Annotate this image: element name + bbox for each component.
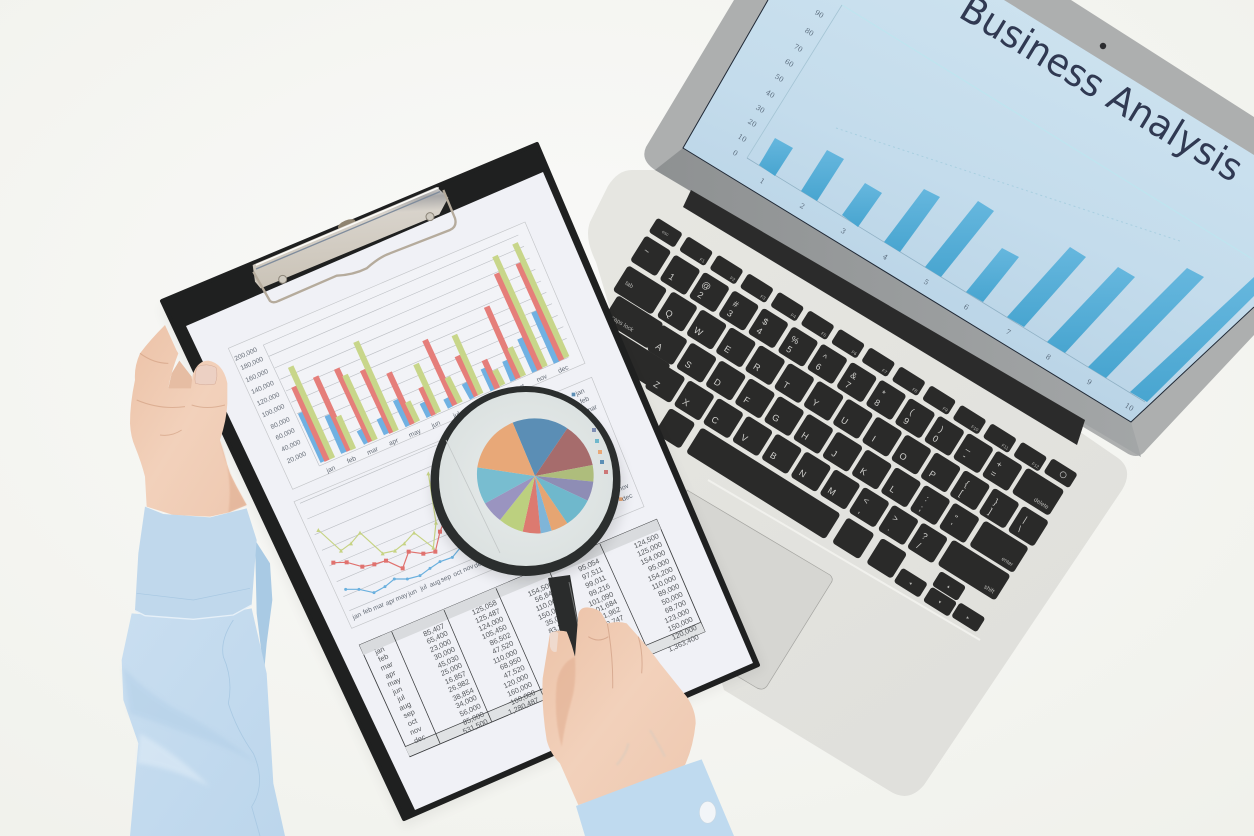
clip plate [253, 187, 448, 288]
function row: F7 [881, 368, 888, 375]
screen y axis labels: 20 [746, 118, 758, 129]
hand shading [220, 440, 247, 513]
line chart month labels [351, 559, 486, 622]
line chart month labels: nov [462, 563, 475, 574]
screen y axis labels: 60 [783, 58, 795, 69]
number row: $ [761, 316, 770, 327]
function row: F9 [942, 406, 949, 413]
values column 4: 102,747 [597, 613, 625, 632]
y axis labels: 20,000 [286, 451, 308, 465]
qwerty row: U [839, 415, 850, 427]
line chart grid [300, 445, 490, 611]
number row: ~ [642, 245, 652, 257]
hand shape [130, 325, 247, 517]
bottom letter row: shift [982, 584, 995, 595]
hinge [683, 190, 1085, 445]
function row: F12 [1031, 461, 1040, 470]
right hand [542, 607, 734, 836]
home row: enter [1000, 556, 1014, 568]
screen x axis labels: 2 [798, 202, 806, 211]
values column 4: 99,216 [587, 581, 611, 599]
values column 3: 154,500 [526, 580, 554, 599]
keyboard well edge [708, 480, 980, 640]
number row: + [994, 459, 1004, 470]
chart frame [228, 222, 585, 489]
month column: jan [372, 644, 386, 657]
laptop screen [683, 0, 1254, 422]
bottom letter row: / [915, 541, 923, 551]
bottom letter row: M [826, 485, 838, 498]
values column 2 [470, 598, 540, 717]
values column 1: 65,400 [425, 629, 449, 646]
blue bars [301, 312, 557, 462]
values column 2: 1,280,487 [507, 695, 540, 717]
values column 5: 95,000 [647, 556, 671, 574]
left hand [130, 325, 247, 517]
x axis labels: jan [325, 465, 337, 475]
values column 3: 150,000 [537, 603, 564, 622]
trackpad [660, 490, 832, 689]
number row: = [989, 468, 998, 479]
qwerty row: P [927, 469, 938, 480]
values column 5: 124,500 [632, 531, 660, 550]
number row: 3 [725, 308, 735, 319]
home row: ' [947, 521, 954, 531]
cuff stitching [137, 588, 250, 600]
values column 5: 1,363,400 [667, 632, 700, 654]
y axis labels: 100,000 [261, 403, 286, 419]
screen y axis labels: 30 [754, 104, 766, 115]
values column 4: 99,011 [584, 573, 607, 590]
qwerty row: O [897, 451, 909, 463]
values column 1: 531,500 [461, 717, 489, 736]
clipboard [162, 144, 758, 819]
values column 2: 160,000 [509, 688, 537, 707]
values column 3: 110,000 [534, 595, 561, 613]
home row: F [742, 395, 752, 406]
line chart month labels: sep [440, 573, 453, 584]
magnifying glass [430, 386, 624, 660]
webcam [1100, 43, 1106, 49]
pie legend labels: jan [574, 388, 586, 398]
values column 5: 110,000 [650, 573, 677, 592]
lower bezel [655, 148, 1141, 457]
values column 3: 83,200 [547, 619, 571, 636]
bottom letter row: < [861, 495, 871, 506]
function row: F6 [851, 349, 858, 357]
bottom letter row: V [739, 432, 749, 444]
screen y axis labels: 90 [813, 9, 825, 20]
paper [186, 172, 753, 810]
green bars [291, 243, 567, 458]
thumbnail [195, 365, 217, 385]
values column 1: 45,030 [436, 653, 460, 670]
month column: feb [377, 652, 390, 664]
bar chart on screen [759, 138, 1254, 402]
home row: H [800, 430, 810, 442]
values column 1 [422, 621, 489, 736]
laptop lid [644, 0, 1254, 456]
function row: F5 [820, 331, 828, 338]
values column 4: 97,511 [580, 565, 604, 582]
handle [548, 575, 583, 660]
number row: 2 [696, 289, 705, 301]
values column 5: 68,700 [663, 598, 687, 615]
qwerty row: W [692, 325, 705, 338]
back finger [168, 361, 193, 392]
values column 2: 68,950 [498, 655, 522, 672]
values column 5: 154,000 [639, 548, 667, 567]
function row: F4 [790, 312, 797, 320]
month column: dec [412, 732, 427, 745]
x axis labels: nov [536, 373, 549, 384]
hand shape [542, 607, 696, 805]
red bars [294, 263, 562, 461]
line chart month labels: mar [372, 601, 386, 612]
number row: 8 [872, 397, 882, 408]
number row: 9 [901, 415, 911, 427]
function row: F11 [1001, 443, 1010, 451]
number row: & [849, 370, 859, 382]
function row: F8 [911, 387, 919, 394]
bottom letter row: . [886, 523, 893, 533]
qwerty row: E [722, 343, 733, 355]
number row [630, 235, 1065, 516]
number row: 4 [755, 325, 764, 337]
number row: % [789, 334, 801, 346]
screen x axis labels: 4 [881, 253, 890, 262]
data table [359, 519, 705, 757]
pie legend labels: nov [617, 482, 631, 493]
values column 2: 124,000 [477, 614, 505, 633]
home row: D [712, 377, 723, 389]
line chart month labels: aug [429, 578, 442, 589]
home row: G [770, 412, 781, 424]
screen y axis labels: 10 [736, 133, 748, 144]
sleeve seam [223, 620, 260, 836]
y axis labels: 120,000 [256, 391, 281, 408]
x axis labels: feb [346, 455, 358, 465]
values column 5: 154,200 [646, 565, 674, 584]
blue line [346, 540, 467, 593]
bar chart panel [228, 222, 585, 489]
line chart month labels: jul [418, 583, 429, 593]
values column 5: 50,000 [660, 590, 684, 607]
bottom letter row: > [891, 513, 900, 524]
bottom letter row [599, 330, 1011, 601]
values column 5: 123,000 [663, 606, 691, 625]
values column 3: 56,840 [533, 587, 557, 604]
number row: ( [908, 407, 916, 417]
qwerty row: T [781, 379, 791, 391]
lens divider [446, 440, 500, 553]
line chart month labels: feb [362, 606, 374, 616]
screen x axis labels: 9 [1085, 378, 1093, 387]
home row: J [830, 448, 839, 459]
month column: may [386, 675, 402, 689]
screen x axis labels: 5 [922, 278, 930, 287]
pie legend labels [572, 388, 634, 503]
x axis labels: jul [451, 411, 462, 420]
screen y axis labels: 80 [803, 27, 815, 38]
left sleeve [122, 507, 285, 836]
values column 2: 47,520 [491, 639, 515, 656]
screen y axis labels: 0 [731, 149, 739, 158]
values column 1: 85,000 [461, 710, 485, 727]
line chart month labels: may [395, 591, 410, 603]
home row: ; [918, 503, 925, 513]
home row [602, 295, 1029, 573]
x axis labels: may [408, 428, 423, 439]
month column: sep [402, 707, 416, 720]
green line [318, 473, 436, 553]
qwerty row: } [992, 497, 1000, 507]
home row: : [923, 494, 931, 504]
screen y axis labels: 40 [764, 89, 776, 100]
pie legend labels: mar [585, 403, 599, 415]
values column 5: 120,000 [670, 623, 698, 642]
home row: " [951, 513, 959, 523]
bottom letter row: C [710, 414, 721, 426]
home row: L [888, 484, 897, 495]
thumbnail [550, 632, 558, 652]
values column 2: 160,000 [506, 680, 533, 699]
x axis labels: apr [388, 437, 400, 447]
clip [253, 187, 456, 302]
right cuff [576, 759, 734, 836]
values column 2: 110,000 [491, 647, 519, 666]
values column 4: 95,054 [577, 556, 601, 574]
number row: _ [965, 441, 976, 453]
month column: jun [390, 684, 404, 697]
values column 1: 25,000 [439, 661, 463, 678]
values column 1: 16,857 [443, 669, 467, 686]
y axis labels: 180,000 [240, 356, 265, 372]
y axis labels: 140,000 [250, 380, 275, 396]
lower charts and table [294, 377, 705, 757]
values column 5 [632, 531, 700, 654]
pie legend labels: dec [621, 492, 634, 503]
y axis labels [234, 346, 308, 465]
values column 5: 89,000 [657, 581, 681, 599]
qwerty row: | [1022, 515, 1029, 524]
values column 1: 26,982 [447, 677, 471, 694]
y axis labels: 40,000 [280, 439, 302, 454]
line chart month labels: jan [351, 611, 363, 622]
spacebar row and arrows: ◂ [908, 580, 913, 587]
values column 2: 125,058 [470, 598, 498, 617]
screen x axis labels [758, 177, 1135, 413]
x axis labels: jun [430, 420, 442, 430]
x axis labels: sep [493, 391, 506, 402]
spacebar row and arrows [654, 408, 986, 632]
number row: 5 [784, 344, 794, 355]
line chart month labels: apr [385, 597, 397, 607]
values column 5: 125,000 [636, 540, 663, 559]
number row: * [879, 388, 888, 399]
laptop base [588, 170, 1127, 796]
values column 1: 30,000 [432, 645, 456, 662]
month column: nov [408, 724, 423, 737]
function row: F10 [970, 424, 980, 433]
ring [430, 386, 620, 576]
qwerty row: { [963, 479, 971, 489]
function row: esc [661, 229, 670, 237]
x axis labels: oct [515, 383, 526, 393]
qwerty row: ] [987, 506, 994, 516]
y axis labels: 60,000 [275, 427, 296, 442]
knuckle vein [617, 730, 665, 765]
number row: 0 [931, 433, 940, 444]
number row: 7 [843, 379, 853, 391]
number row: 1 [667, 271, 677, 282]
line chart month labels: jun [406, 588, 418, 598]
month column: mar [379, 659, 395, 673]
values column 1: 38,854 [451, 686, 475, 703]
bottom letter row: , [857, 505, 864, 515]
screen y axis labels: 70 [792, 43, 804, 54]
bottom letter row: X [681, 397, 691, 408]
clip wire [253, 190, 456, 302]
y axis labels: 160,000 [245, 368, 270, 384]
values column 2: 86,502 [488, 630, 512, 648]
screen x axis labels: 3 [839, 227, 847, 236]
month column: apr [384, 668, 397, 681]
values column 1: 34,000 [454, 693, 478, 710]
magnified legend swatches [592, 428, 608, 474]
clip hinge bump [337, 217, 357, 232]
qwerty row: R [751, 361, 763, 373]
cuff button [699, 801, 716, 823]
lens shadow [432, 398, 624, 582]
values column 4: 101,684 [591, 597, 618, 616]
home row: S [683, 359, 693, 371]
values column 4 [577, 556, 625, 632]
qwerty row: Y [810, 397, 821, 409]
home row: caps lock [610, 315, 635, 334]
month column: aug [398, 699, 412, 713]
lens [439, 392, 613, 566]
screen y axis labels [731, 9, 825, 158]
x axis labels [325, 364, 570, 475]
bottom letter row: Z [652, 379, 662, 391]
values column 1: 56,000 [458, 701, 482, 719]
values column 1: 85,407 [422, 621, 446, 639]
qwerty row: [ [957, 488, 965, 498]
bottom letter row: B [768, 450, 779, 462]
number row: delete [1032, 497, 1050, 511]
values column 4: 101,090 [587, 590, 615, 609]
values column 3 [526, 580, 571, 636]
laptop [588, 0, 1254, 796]
values column 1: 23,000 [428, 637, 452, 654]
finger creases [588, 623, 642, 688]
number row: 6 [814, 361, 823, 372]
month column: oct [406, 716, 419, 728]
month column [372, 644, 427, 745]
function row [648, 218, 1078, 488]
keyboard [599, 218, 1078, 632]
home row: A [654, 341, 664, 353]
screen y axis labels: 50 [773, 73, 785, 84]
qwerty row: tab [624, 281, 634, 290]
line chart month labels: oct [452, 569, 463, 579]
qwerty row [613, 265, 1049, 547]
function row: F2 [729, 275, 737, 283]
number row: ^ [820, 352, 829, 363]
thumb shadow [556, 657, 575, 747]
values column 2: 125,487 [474, 606, 501, 625]
spacebar row and arrows: ▾ [937, 599, 943, 606]
function row: F1 [699, 257, 706, 264]
line chart month labels: dec [473, 559, 486, 570]
bottom letter row: ? [920, 531, 929, 542]
values column 2: 105,450 [480, 622, 508, 641]
bottom letter row: N [797, 468, 808, 480]
number row: # [731, 299, 741, 310]
x axis labels: aug [471, 401, 484, 412]
number row: - [961, 451, 968, 461]
pie legend labels: feb [579, 395, 591, 406]
red line [333, 504, 451, 568]
month column: jul [395, 692, 406, 704]
clip rivets [279, 275, 287, 283]
x axis labels: mar [366, 445, 380, 457]
chart frame [294, 377, 644, 628]
y axis labels: 80,000 [270, 416, 291, 431]
function row: F3 [759, 294, 767, 301]
qwerty row: I [870, 434, 878, 444]
sleeve folds [123, 667, 257, 763]
cuff [135, 507, 257, 619]
screen x axis labels: 10 [1123, 402, 1135, 413]
number row: ) [937, 424, 945, 434]
values column 2: 120,000 [502, 671, 530, 690]
grid lines [263, 235, 568, 466]
values column 4: 101,962 [594, 605, 622, 624]
screen x axis labels: 8 [1044, 353, 1052, 362]
hand creases [137, 353, 225, 435]
qwerty row: \ [1016, 524, 1024, 534]
number row: @ [700, 279, 713, 292]
screen x axis labels: 6 [962, 303, 971, 312]
y axis labels: 200,000 [234, 346, 259, 363]
pie chart [477, 418, 594, 533]
x axis labels: dec [557, 364, 570, 375]
screen x axis labels: 1 [758, 177, 766, 186]
spacebar row and arrows: ▴ [946, 584, 952, 590]
values column 2: 47,520 [502, 663, 526, 680]
clipboard shadow [159, 300, 764, 828]
spacebar row and arrows: ▸ [965, 615, 971, 622]
values column 3: 35,000 [544, 611, 568, 628]
qwerty row: Q [663, 308, 675, 320]
home row: K [858, 466, 869, 477]
back placket [255, 540, 272, 673]
screen x axis labels: 7 [1004, 328, 1012, 337]
values column 5: 150,000 [666, 615, 694, 634]
sleeve body [122, 608, 285, 836]
